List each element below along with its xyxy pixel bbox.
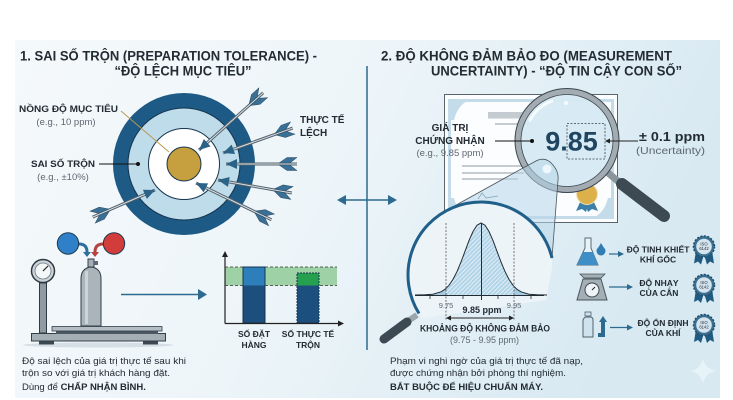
icon: scale with gas cylinder	[23, 259, 173, 348]
divider with double arrow	[337, 66, 397, 350]
panel: preparation tolerance	[19, 48, 345, 393]
panel: measurement uncertainty	[381, 48, 714, 393]
heading: section 2	[381, 48, 682, 78]
label: actual deviation: THỰC TẾ	[300, 113, 345, 126]
label: uncertainty	[605, 129, 705, 157]
label	[639, 277, 679, 298]
label: target concentration: NỒNG ĐỘ MỤC TIÊU	[19, 103, 118, 114]
icon: ISO badge: ISO	[700, 320, 708, 325]
chart label: actual: TRỘN	[296, 339, 320, 350]
chart label: actual	[282, 328, 335, 350]
icon: gas balls flowing into cylinder	[57, 233, 125, 257]
chart label: ordered: SỐ ĐẶT	[238, 328, 271, 339]
label: actual deviation: LỆCH	[300, 126, 327, 139]
icon: ISO badge	[694, 236, 714, 264]
label: uncertainty: (Uncertainty)	[636, 145, 705, 157]
label: ĐỘ TINH KHIẾT	[627, 244, 690, 254]
factor: gas purity	[577, 236, 714, 265]
label: certified value: CHỨNG NHẬN	[415, 134, 485, 147]
text block: uncertainty description: BẮT BUỘC ĐỂ HIỆU CHUẨN MÁY.	[390, 381, 543, 393]
label: actual deviation	[300, 113, 345, 139]
chart label: ordered: HÀNG	[241, 340, 267, 350]
magnifying glass	[515, 88, 664, 216]
arrows hitting target	[90, 88, 297, 226]
label: certified value	[415, 121, 534, 159]
target chart	[113, 93, 255, 235]
label: target concentration: (e.g., 10 ppm)	[36, 117, 96, 128]
chart label: actual: SỐ THỰC TẾ	[282, 328, 335, 339]
label: uncertainty range: KHOẢNG ĐỘ KHÔNG ĐẢM BẢO	[420, 322, 550, 334]
label: ĐỘ ỔN ĐỊNH	[638, 317, 688, 328]
label: KHÍ GỐC	[640, 254, 676, 264]
label: certified value: GIÁ TRỊ	[432, 121, 469, 134]
heading: section 1	[20, 48, 317, 78]
text block: uncertainty description	[390, 356, 583, 393]
label: preparation tolerance: SAI SỐ TRỘN	[31, 158, 95, 169]
arrow	[610, 324, 633, 330]
label: uncertainty: ± 0.1 ppm	[639, 129, 705, 144]
text block: uncertainty description: được chứng nhận bởi phòng thí nghiệm.	[390, 368, 566, 379]
label	[638, 317, 688, 338]
icon: kitchen scale	[577, 274, 607, 300]
icon: sparkle	[690, 358, 716, 384]
text block: tolerance description: Độ sai lệch của giá trị thực tế sau khi	[22, 356, 186, 367]
factor: scale sensitivity	[577, 274, 714, 303]
axis labels: 9.75	[439, 301, 453, 310]
axis labels: 9.85 ppm	[462, 305, 502, 315]
bar chart: ordered vs actual	[222, 251, 344, 350]
bell curve magnifier	[384, 202, 552, 339]
heading: section 2: 2. ĐỘ KHÔNG ĐẢM BẢO ĐO (MEASUREMENT	[381, 48, 673, 64]
icon: ISO badge: ISO	[700, 280, 708, 285]
label: preparation tolerance: (e.g., ±10%)	[37, 172, 89, 183]
heading: section 1: “ĐỘ LỆCH MỤC TIÊU”	[114, 64, 252, 78]
range arrow	[446, 316, 514, 320]
text block: tolerance description: Dùng để CHẤP NHẬN BÌNH.	[22, 381, 146, 393]
icon: bottle and up arrow	[583, 312, 607, 337]
icon: ISO badge: 6142	[699, 284, 709, 290]
label: ĐỘ NHẠY	[639, 277, 679, 288]
icon: certificate seal	[576, 184, 598, 212]
icon: ISO badge	[694, 274, 714, 303]
icon: ISO badge: 6142	[699, 246, 709, 251]
arrow	[609, 251, 624, 257]
chart: normal distribution	[415, 223, 547, 320]
text block: tolerance description	[22, 356, 186, 393]
icon: ISO badge: 6142	[699, 324, 709, 330]
heading: section 2: UNCERTAINTY) - “ĐỘ TIN CẬY CON SỐ”	[431, 64, 682, 78]
icon: ISO badge: ISO	[700, 242, 708, 246]
icon: flask	[577, 238, 606, 265]
label: uncertainty range	[420, 322, 550, 345]
chart label: ordered	[238, 328, 271, 350]
arrow: scale to chart	[121, 289, 207, 300]
axis labels: 9.95	[507, 301, 521, 310]
label: certified value: (e.g., 9.85 ppm)	[416, 148, 484, 159]
label: CỦA CÂN	[640, 287, 678, 298]
axis labels	[439, 301, 521, 315]
icon: ISO badge	[694, 314, 714, 343]
label: CỦA KHÍ	[645, 327, 681, 338]
label	[627, 244, 690, 264]
label: uncertainty range: (9.75 - 9.95 ppm)	[450, 335, 519, 345]
text block: tolerance description: trộn so với giá trị khách hàng đặt.	[22, 368, 170, 379]
small magnifier beam	[440, 159, 558, 280]
label: target concentration	[19, 103, 169, 152]
factor: gas stability	[583, 312, 714, 343]
text block: uncertainty description: Phạm vi nghi ngờ của giá trị thực tế đã nạp,	[390, 356, 583, 367]
heading: section 1: 1. SAI SỐ TRỘN (PREPARATION TOLERANCE) -	[20, 48, 317, 64]
value: 9.85: 9.85	[545, 126, 598, 156]
arrow	[609, 284, 633, 290]
label: preparation tolerance	[31, 158, 140, 183]
certificate	[444, 94, 618, 222]
